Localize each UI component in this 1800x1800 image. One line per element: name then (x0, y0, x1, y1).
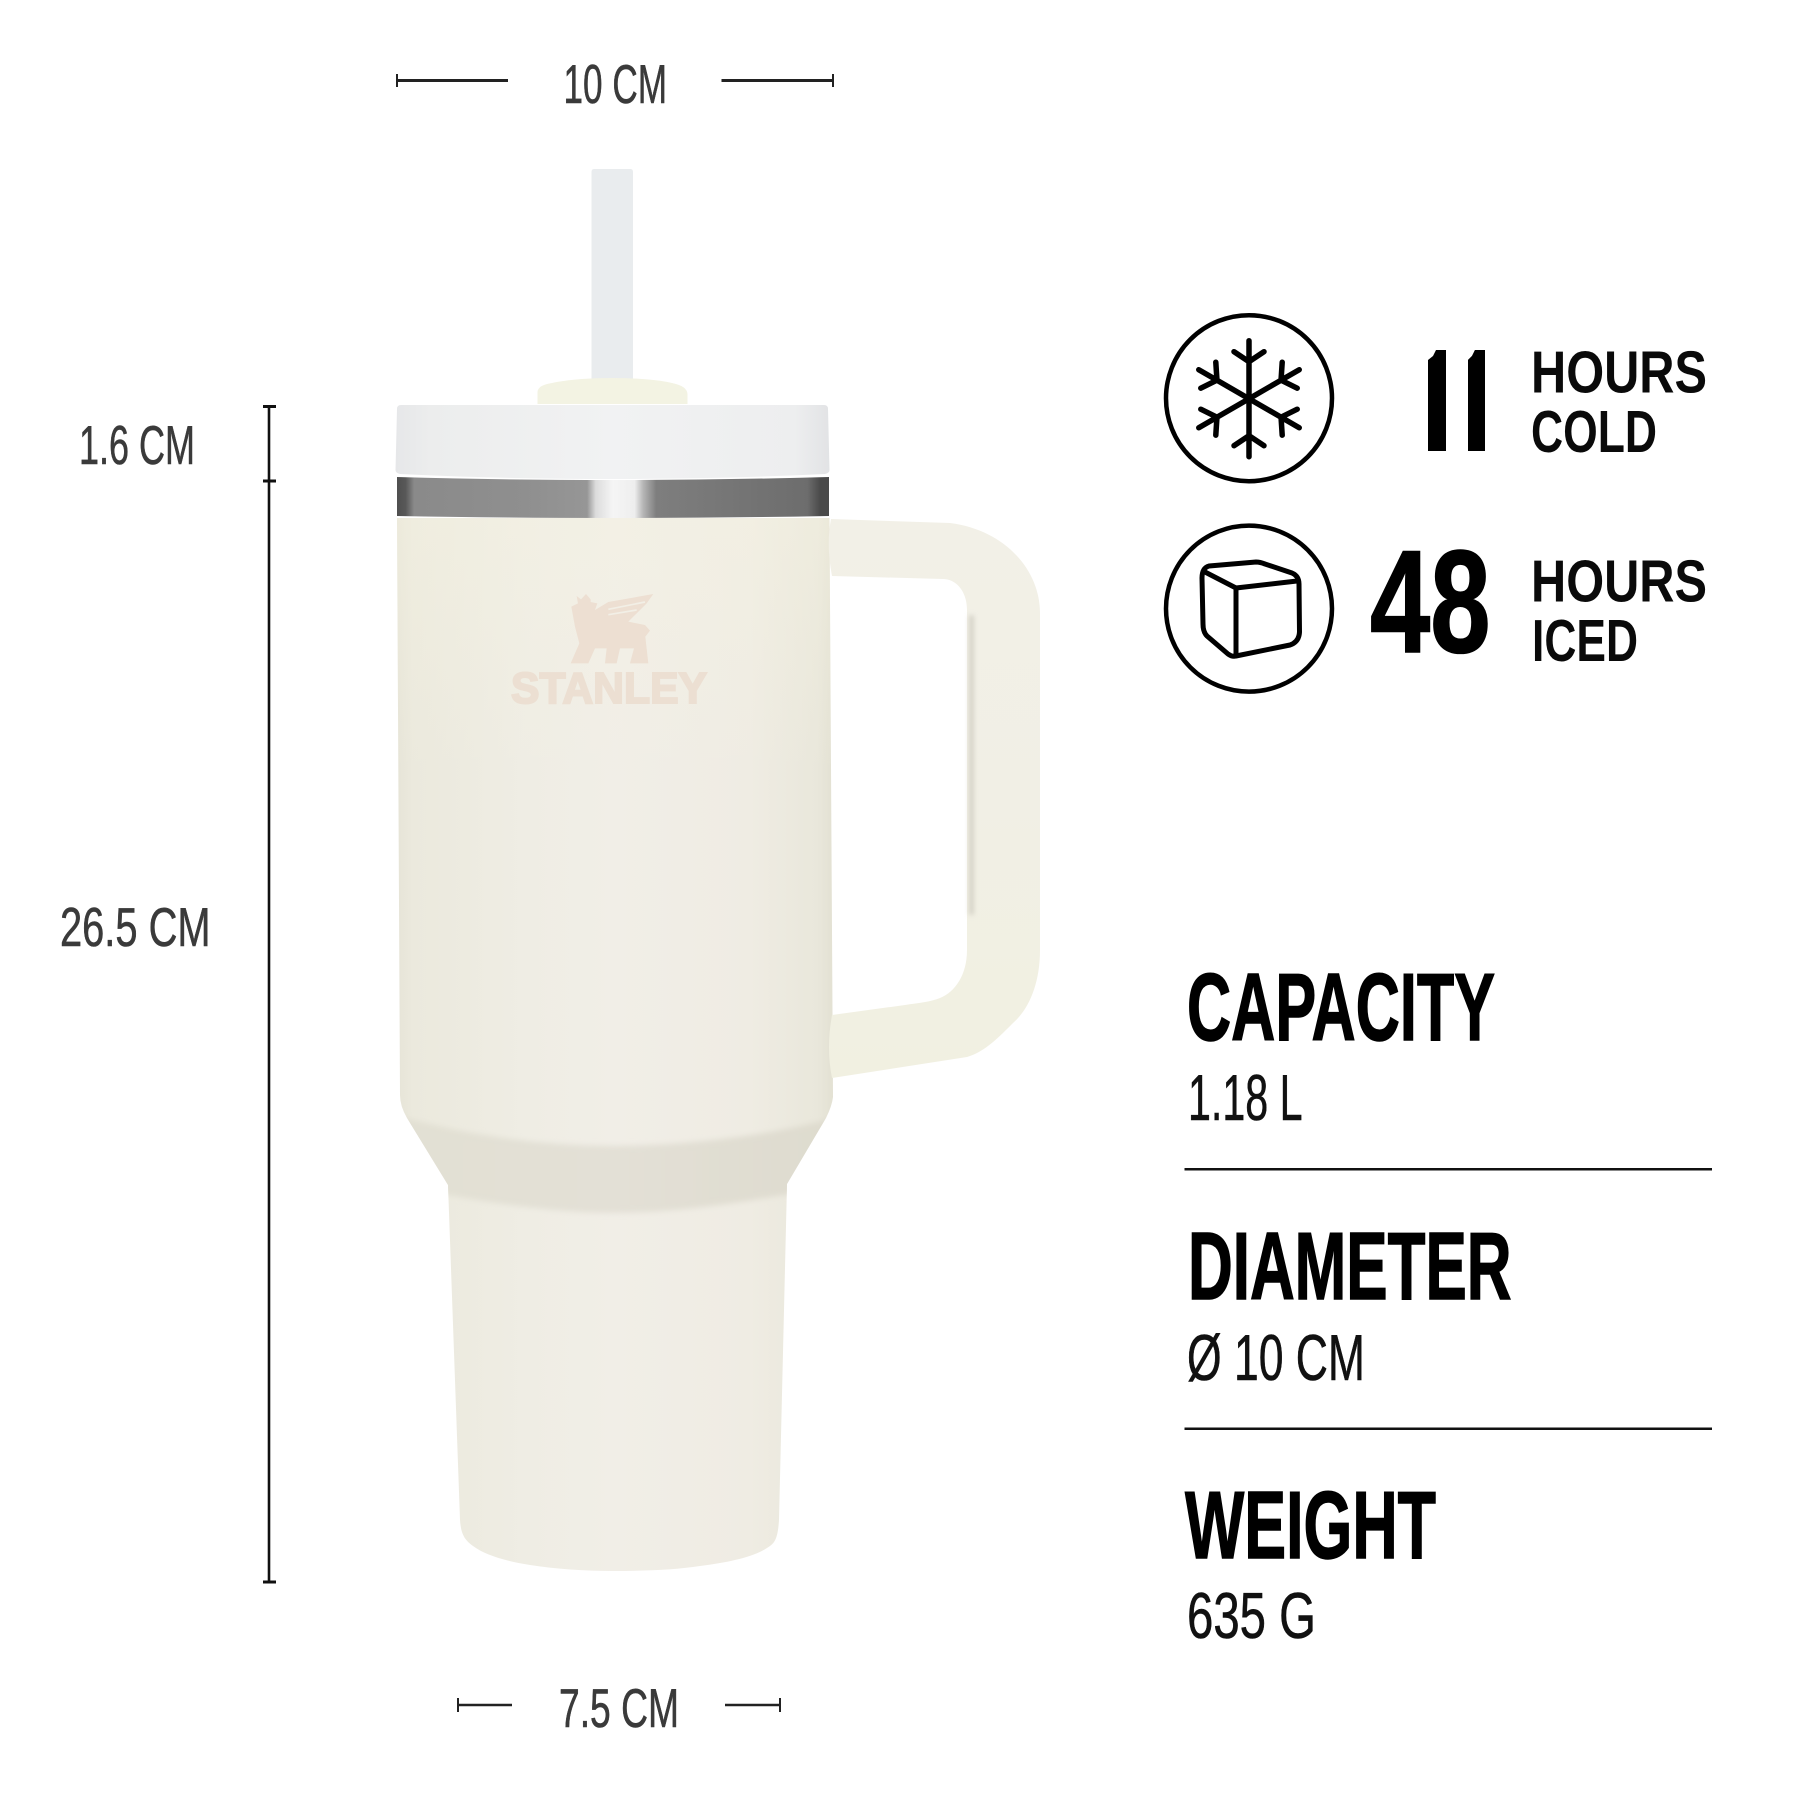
straw plug (538, 378, 688, 404)
handle (829, 519, 1040, 1078)
dimension: base width 7.5 CM (458, 1677, 780, 1739)
tapered shaded band (408, 1120, 824, 1213)
icon: snowflake in circle (1166, 315, 1332, 481)
tumbler body (390, 516, 840, 1576)
spec: diameter: DIAMETER (1188, 1213, 1512, 1320)
icon: ice cube in circle (1166, 526, 1332, 692)
handle inner shadow (969, 615, 974, 915)
tumbler illustration (390, 169, 1040, 1576)
spec: weight (1185, 1472, 1436, 1652)
logo: wordmark: STANLEY (511, 664, 707, 713)
dimension: top width 10 CM: 10 CM (564, 53, 667, 115)
straw (592, 169, 633, 386)
lid (396, 405, 830, 479)
stat: 48 hours iced: HOURS (1531, 548, 1707, 614)
number bars (1428, 350, 1485, 451)
stat: 48 hours iced (1370, 520, 1707, 683)
stat: 11 hours cold (1428, 350, 1706, 452)
stat: 11 hours cold: 11 (1428, 319, 1485, 482)
body fill (390, 516, 840, 1576)
spec: diameter: Ø 10 CM (1187, 1321, 1365, 1394)
spec: weight: 635 G (1187, 1579, 1316, 1652)
stat: 11 hours cold: COLD (1531, 399, 1657, 465)
dimension: top width 10 CM (396, 53, 834, 115)
stat: 48 hours iced: 48 (1370, 520, 1490, 683)
logo: winged bear (571, 594, 653, 663)
spec: weight: WEIGHT (1185, 1472, 1436, 1579)
stat: 11 hours cold: HOURS (1531, 340, 1707, 406)
label: body height: 26.5 CM (60, 896, 210, 958)
spec: diameter (1187, 1213, 1512, 1394)
stat: 48 hours iced: ICED (1532, 608, 1638, 674)
spec: capacity: 1.18 L (1188, 1061, 1302, 1134)
stanley logo (511, 594, 707, 713)
spec: capacity: CAPACITY (1187, 954, 1495, 1061)
divider (1184, 1428, 1712, 1430)
dimension: lid height and body height (60, 406, 276, 1582)
body warm top tint (390, 516, 840, 776)
dimension: base width 7.5 CM: 7.5 CM (559, 1677, 679, 1739)
divider (1184, 1168, 1712, 1170)
steel ring (397, 477, 829, 518)
label: lid height: 1.6 CM (79, 414, 195, 476)
spec: capacity (1187, 954, 1495, 1134)
